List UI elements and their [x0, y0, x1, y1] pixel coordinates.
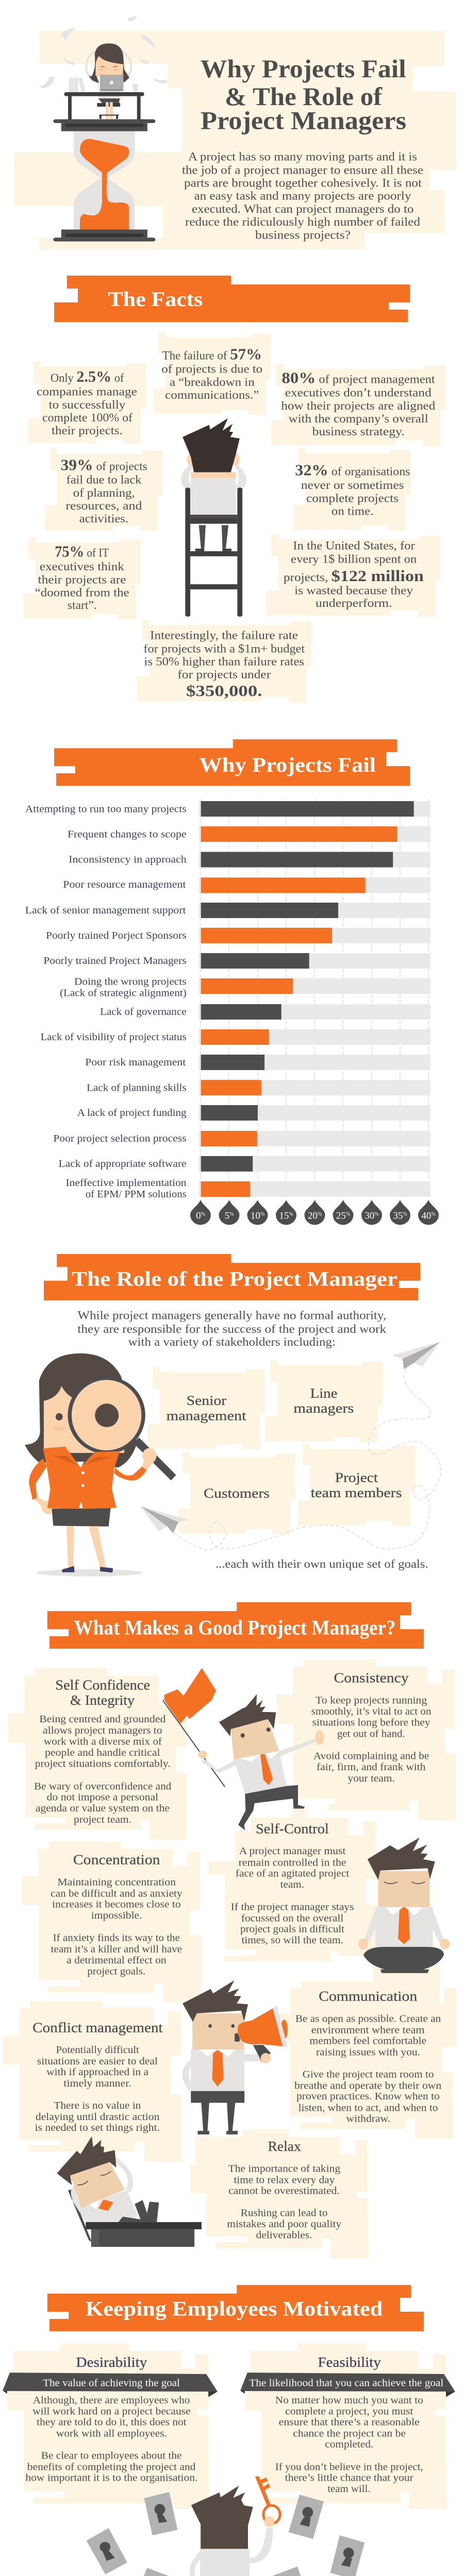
panel: relax: Relax	[268, 2139, 301, 2154]
panel: consistency: get out of hand.	[337, 1728, 405, 1740]
fact: 39%: resources, and	[65, 499, 142, 512]
fact: 75%: 75% of IT	[55, 542, 109, 560]
fact: 2.5%: Only 2.5% of	[51, 367, 124, 385]
chart axis: percentage drops: 20	[308, 1211, 318, 1222]
panel: consistency: smoothly, it’s vital to act on	[311, 1706, 431, 1717]
panel: self confidence and integrity	[8, 1668, 187, 1840]
panel: conflict management: is needed to set things right.	[35, 2122, 160, 2133]
bar: lack of senior management support	[25, 903, 430, 918]
panel: consistency: To keep projects running	[316, 1694, 427, 1706]
panel: senior management: management	[167, 1408, 246, 1423]
panel: concentration: can be difficult and as anxiety	[51, 1888, 183, 1899]
heading banner: the role of the project manager	[44, 1254, 420, 1300]
fact: 57%: of projects is due to	[161, 363, 262, 376]
bar: attempting to run too many projects	[25, 801, 430, 817]
intro text	[182, 150, 423, 241]
panel: communication: withdraw.	[346, 2113, 390, 2125]
bar: inconsistency in approach: Inconsistency in approach	[69, 854, 187, 866]
panel: feasibility: ensure that there’s a reasonable	[279, 2417, 420, 2428]
illustration: man with flag	[163, 1668, 324, 1831]
heading banner: why projects fail	[54, 739, 410, 786]
intro text: executed. What can project managers do to	[192, 202, 413, 215]
fact: 80%: business strategy.	[312, 425, 405, 438]
panel: conflict management: Conflict management	[32, 2020, 163, 2036]
panel: conflict management: delaying until drastic action	[36, 2111, 159, 2123]
bar: frequent changes to scope	[68, 826, 430, 842]
panel: feasibility: complete a project, you must	[285, 2406, 413, 2417]
panel: self-control: focussed on the overall	[241, 1912, 344, 1924]
text: role intro: they are responsible for the success of the project and work	[77, 1323, 387, 1335]
heading banner: the facts	[54, 276, 410, 322]
fact: $350,000: is 50% higher than failure rates	[144, 655, 304, 668]
illustration: relaxing man at desk	[57, 2136, 202, 2247]
chart axis: percentage drops: 35	[393, 1211, 403, 1222]
bar: poor risk management	[85, 1055, 430, 1070]
heading banner: the facts: The Facts	[108, 287, 203, 311]
text: each with their own goals: ...each with their own unique set of goals.	[216, 1557, 428, 1570]
heading banner: what makes a good project manager: What Makes a Good Project Manager?	[74, 1616, 396, 1639]
fact: 2.5%: to successfully	[49, 398, 126, 411]
panel: desirability: Be clear to employees about the	[41, 2450, 182, 2462]
chart axis: percentage drops: %	[201, 1212, 205, 1217]
ribbon: the likelihood that you can achieve the goal	[240, 2372, 455, 2397]
chart axis: percentage drops: 40	[421, 1211, 431, 1222]
chart axis: percentage drops	[190, 1200, 439, 1225]
icon: paper plane bottom	[141, 1506, 189, 1533]
bar: poorly trained project managers	[43, 953, 430, 969]
fact: 2.5%: companies manage	[37, 385, 137, 398]
panel: conflict management: with if approached in a	[46, 2066, 148, 2078]
fact: $122 million: every 1$ billion spent on	[291, 552, 417, 565]
fact: 32%	[293, 448, 411, 531]
fact: 39%: fail due to lack	[67, 473, 142, 486]
panel: communication: listen, when to act, and when to	[299, 2102, 438, 2113]
fact: $350,000	[137, 620, 311, 702]
panel: consistency: your team.	[347, 1773, 395, 1784]
illustration: woman with magnifying glass	[25, 1353, 176, 1577]
panel: concentration: project goals.	[87, 1966, 145, 1977]
panel: communication: proven practices. Know when to	[296, 2091, 440, 2102]
fact: 80%	[271, 364, 445, 446]
bar: lack of visibility of project status: Lack of visibility of project status	[41, 1031, 187, 1043]
bar: poor resource management	[63, 877, 430, 893]
bar chart: causes of project failure	[25, 799, 439, 1225]
panel: relax: cannot be overestimated.	[228, 2185, 340, 2196]
ribbon: the value of achieving the goal	[3, 2372, 218, 2397]
fact: 75%: their projects are	[38, 573, 126, 586]
icon: flying papers	[39, 16, 167, 88]
icon: binders and glass	[69, 78, 139, 92]
panel: conflict management: Potentially difficult	[56, 2044, 139, 2056]
panel: self-control: A project manager must	[239, 1845, 346, 1857]
panel: communication: Communication	[319, 1988, 418, 2004]
fact: 39%: 39% of projects	[61, 456, 147, 474]
bar: poor project selection process: Poor project selection process	[53, 1133, 187, 1144]
panel: consistency: situations long before they	[312, 1717, 430, 1728]
fact: $122 million: is wasted because they	[294, 584, 413, 597]
fact: 80%: how their projects are aligned	[281, 399, 436, 412]
chart axis: percentage drops: %	[431, 1212, 436, 1217]
fact: $122 million: projects, $122 million	[284, 567, 424, 585]
bar: lack of planning skills: Lack of planning skills	[87, 1082, 187, 1093]
bar: doing the wrong projects: Doing the wrong projects	[74, 976, 187, 987]
panel: feasibility: there’s little chance that your	[285, 2472, 413, 2483]
bar: attempting to run too many projects: Attempting to run too many projects	[25, 803, 187, 815]
panel: project team members: Project	[335, 1470, 378, 1485]
illustration: man on a high chair	[181, 418, 246, 617]
bar: doing the wrong projects: (Lack of strategic alignment)	[60, 987, 187, 998]
panel: self confidence and integrity: work with a diverse mix of	[44, 1736, 162, 1747]
panel: self confidence and integrity: Self Confidence	[55, 1677, 150, 1693]
panel: line managers: managers	[293, 1401, 354, 1416]
fact: $122 million: In the United States, for	[293, 539, 415, 552]
panel: desirability: Desirability	[76, 2354, 147, 2370]
panel: self confidence and integrity: Being centred and grounded	[39, 1714, 165, 1725]
panel: desirability: they are told to do it, this does not	[37, 2417, 187, 2428]
panel: customers: Customers	[204, 1486, 270, 1501]
panel: conflict management: There is no value in	[54, 2100, 141, 2111]
panel: consistency: Avoid complaining and be	[313, 1750, 429, 1761]
panel: concentration: team it’s a killer and will have	[51, 1943, 182, 1955]
bar: poorly trained project managers: Poorly trained Project Managers	[43, 955, 187, 967]
chart axis: percentage drops: %	[318, 1212, 322, 1217]
fact: 32%: complete projects	[306, 492, 399, 505]
fact: 75%	[23, 537, 141, 619]
panel: self confidence and integrity: agenda or value system on the	[36, 1803, 170, 1814]
illustration: meditating man	[358, 1838, 450, 1973]
panel: concentration: If anxiety finds its way to the	[53, 1933, 180, 1944]
text: role intro: While project managers generally have no formal authority,	[77, 1309, 386, 1322]
section: why projects fail	[25, 739, 439, 1225]
bar: ineffective implementation of EPM/PPM solutions: Ineffective implementation	[65, 1177, 187, 1189]
fact: 39%	[45, 449, 162, 531]
panel: self-control: times, so will the team.	[241, 1935, 343, 1946]
panel: self confidence and integrity: & Integrity	[70, 1692, 135, 1708]
fact: 75%: “doomed from the	[35, 586, 129, 599]
bar: lack of appropriate software: Lack of appropriate software	[59, 1158, 187, 1170]
section: keeping employees motivated	[3, 2285, 458, 2576]
intro text: reduce the ridiculously high number of failed	[185, 215, 421, 228]
panel: communication: Be as open as possible. Create an	[295, 2013, 441, 2024]
panel: feasibility: No matter how much you want to	[275, 2395, 423, 2406]
panel: hero background	[14, 31, 456, 249]
panel: self confidence and integrity: people and handle critical	[45, 1747, 160, 1758]
section: role of the project manager	[25, 1254, 441, 1577]
icon: hourglass	[53, 120, 155, 242]
panel: project team members	[297, 1444, 415, 1526]
icon: paper plane top	[392, 1342, 440, 1369]
bar: doing the wrong projects	[60, 976, 430, 998]
panel: communication: environment where team	[311, 2025, 425, 2036]
panel: desirability: Although, there are employees who	[33, 2395, 190, 2406]
panel: self confidence and integrity: Be wary of overconfidence and	[34, 1781, 171, 1792]
bar: frequent changes to scope: Frequent changes to scope	[68, 828, 187, 840]
panel: self-control: project goals in difficult	[240, 1923, 344, 1935]
section: hero	[14, 16, 456, 249]
fact: 80%: with the company’s overall	[289, 412, 428, 425]
panel: consistency: Consistency	[334, 1670, 409, 1686]
panel: senior management: Senior	[187, 1393, 226, 1408]
intro text: the job of a project manager to ensure all these	[182, 164, 423, 176]
bar: ineffective implementation of EPM/PPM solutions: of EPM/ PPM solutions	[86, 1189, 187, 1200]
panel: self confidence and integrity: allows project managers to	[43, 1725, 162, 1736]
panel: feasibility: Feasibility	[318, 2354, 381, 2370]
panel: self confidence and integrity: project team.	[74, 1814, 131, 1825]
bar: poor project selection process	[53, 1131, 430, 1146]
panel: self-control: If the project manager stays	[231, 1902, 354, 1913]
panel: line managers: Line	[310, 1386, 337, 1401]
fact: 39%: of planning,	[73, 486, 135, 499]
panel: desirability: will work hard on a project because	[32, 2406, 191, 2417]
heading banner: why projects fail: Why Projects Fail	[199, 753, 376, 776]
panel: concentration: a detrimental effect on	[67, 1955, 167, 1966]
intro text: parts are brought together cohesively. It is not	[184, 177, 422, 190]
chart axis: percentage drops: %	[260, 1212, 264, 1217]
panel: communication: raising issues with you.	[316, 2046, 420, 2058]
panel: self confidence and integrity: do not impose a personal	[47, 1791, 159, 1803]
bar: a lack of project funding: A lack of project funding	[77, 1107, 187, 1118]
panel: relax: time to relax every day	[234, 2174, 335, 2185]
intro text: business projects?	[255, 228, 351, 241]
title	[201, 54, 406, 135]
bar: lack of governance: Lack of governance	[100, 1006, 187, 1018]
panel: feasibility	[240, 2344, 455, 2509]
chart axis: percentage drops: 30	[364, 1211, 374, 1222]
heading banner: keeping employees motivated: Keeping Employees Motivated	[86, 2297, 383, 2320]
panel: self-control	[208, 1808, 376, 1961]
fact: 57%: a “breakdown in	[170, 376, 255, 388]
panel: self-control: Self-Control	[256, 1821, 329, 1836]
panel: desirability: work with all employees.	[56, 2428, 167, 2439]
panel: senior management	[147, 1367, 265, 1450]
fact: $350,000: $350,000.	[186, 682, 262, 700]
bar: ineffective implementation of EPM/PPM solutions	[65, 1177, 430, 1200]
panel: communication: breathe and operate by their own	[294, 2080, 441, 2092]
bar: lack of governance	[100, 1004, 430, 1020]
bar: poor resource management: Poor resource management	[63, 879, 186, 890]
chart axis: percentage drops: %	[374, 1212, 379, 1217]
panel: project team members: team members	[311, 1485, 402, 1500]
fact: $122 million	[266, 534, 440, 617]
panel: desirability: benefits of completing the project and	[27, 2461, 195, 2472]
fact: $350,000: Interestingly, the failure rate	[150, 629, 298, 641]
chart axis: percentage drops: %	[346, 1212, 350, 1217]
fact: 75%: executives think	[40, 560, 124, 573]
panel: relax: Rushing can lead to	[241, 2207, 328, 2218]
bar: a lack of project funding	[77, 1105, 430, 1121]
icon: key	[255, 2476, 280, 2523]
panel: self-control: face of an agitated project	[236, 1868, 350, 1879]
panel: concentration: impossible.	[91, 1910, 142, 1921]
title: & The Role of	[225, 82, 383, 111]
panel: relax: The importance of taking	[228, 2163, 340, 2174]
heading banner: what makes a good project manager	[47, 1602, 424, 1649]
arrow: paper plane dashed flight path	[141, 1342, 441, 1550]
panel: consistency	[277, 1659, 456, 1821]
fact: 57%: communications.”	[165, 388, 259, 401]
fact: 57%	[153, 332, 271, 415]
fact: 75%: start”.	[68, 599, 97, 612]
fact: $350,000: for projects with a $1m+ budget	[143, 642, 305, 655]
fact: 32%: on time.	[332, 504, 373, 517]
section: what makes a good project manager	[3, 1602, 457, 2259]
fact: 2.5%: complete 100% of	[42, 411, 132, 424]
bar: lack of appropriate software	[59, 1156, 430, 1172]
heading banner: keeping employees motivated	[47, 2285, 424, 2331]
panel: consistency: fair, firm, and frank with	[317, 1761, 425, 1773]
bar: poorly trained project sponsors: Poorly trained Porject Sponsors	[46, 930, 187, 941]
fact: $350,000: for projects under	[177, 668, 271, 681]
ribbon: the likelihood that you can achieve the goal: The likelihood that you can achieve the goal	[249, 2377, 444, 2388]
fact: 80%: 80% of project management	[281, 369, 435, 387]
bar: inconsistency in approach	[69, 852, 430, 868]
panel: self confidence and integrity: project situations comfortably.	[35, 1758, 171, 1769]
fact: 80%: executives don’t understand	[285, 386, 432, 399]
panel: relax	[190, 2129, 369, 2259]
title: Why Projects Fail	[201, 54, 406, 83]
chart axis: percentage drops: 5	[225, 1211, 229, 1222]
panel: concentration: increases it becomes close to	[52, 1899, 181, 1910]
heading banner: the role of the project manager: The Role of the Project Manager	[72, 1267, 397, 1291]
panel: communication: members feel comfortable	[309, 2035, 426, 2046]
intro text: A project has so many moving parts and it is	[188, 150, 417, 163]
chart axis: percentage drops: 25	[336, 1211, 346, 1222]
panel: conflict management: timely manner.	[63, 2078, 131, 2089]
panel: relax: mistakes and poor quality	[227, 2218, 341, 2230]
section: the facts	[23, 276, 445, 702]
chart axis: percentage drops: 15	[279, 1211, 289, 1222]
panel: feasibility: team will.	[327, 2483, 371, 2495]
panel: feasibility: If you don’t believe in the project,	[275, 2461, 423, 2472]
panel: relax: deliverables.	[256, 2230, 312, 2241]
bar: lack of planning skills	[87, 1080, 430, 1095]
bar: poorly trained project sponsors	[46, 928, 430, 943]
bar: lack of senior management support: Lack of senior management support	[25, 905, 186, 916]
bar: poor risk management: Poor risk management	[85, 1057, 186, 1068]
chart axis: percentage drops: %	[403, 1212, 407, 1217]
fact: 32%: never or sometimes	[301, 479, 404, 492]
icon: woman	[86, 43, 131, 120]
panel: concentration	[22, 1841, 201, 2003]
icon: desk	[64, 92, 144, 120]
panel: feasibility: chance the project can be	[293, 2428, 406, 2439]
panel: conflict management	[3, 2001, 182, 2162]
panel: feasibility: completed.	[325, 2438, 373, 2450]
fact: 2.5%	[28, 362, 146, 444]
bar: lack of visibility of project status	[41, 1029, 430, 1045]
illustration: man with key and locks	[87, 2476, 364, 2576]
panel: conflict management: situations are easier to deal	[37, 2056, 158, 2067]
panel: self-control: remain controlled in the	[239, 1857, 346, 1868]
ribbon: the value of achieving the goal: The value of achieving the goal	[43, 2377, 180, 2388]
panel: desirability	[3, 2344, 218, 2509]
panel: line managers	[265, 1360, 383, 1443]
panel: self-control: team.	[280, 1879, 304, 1890]
fact: 2.5%: their projects.	[52, 424, 123, 437]
icon: keyhole cards	[87, 2492, 364, 2576]
chart axis: percentage drops: 0	[196, 1211, 201, 1222]
intro text: an easy task and many projects are poorly	[194, 190, 411, 202]
text: role intro: with a variety of stakeholders including:	[128, 1335, 336, 1348]
illustration: woman at desk on hourglass	[39, 16, 167, 242]
panel: communication	[274, 1966, 457, 2139]
fact: 39%: activities.	[79, 512, 128, 525]
panel: desirability: how important it is to the organisation.	[25, 2472, 197, 2483]
text: role intro	[77, 1309, 387, 1348]
title: Project Managers	[201, 106, 406, 135]
fact: 32%: 32% of organisations	[295, 461, 410, 479]
panel: communication: Give the project team room to	[303, 2069, 434, 2080]
panel: concentration: Maintaining concentration	[57, 1877, 176, 1888]
fact: $122 million: underperform.	[316, 597, 392, 609]
illustration: man with megaphone	[183, 1980, 288, 2134]
panel: concentration: Concentration	[73, 1852, 160, 1867]
chart axis: percentage drops: %	[229, 1212, 234, 1217]
panel: customers	[178, 1452, 295, 1534]
chart axis: percentage drops: %	[289, 1212, 293, 1217]
fact: 57%: The failure of 57%	[162, 345, 262, 363]
chart axis: percentage drops: 10	[251, 1211, 260, 1222]
